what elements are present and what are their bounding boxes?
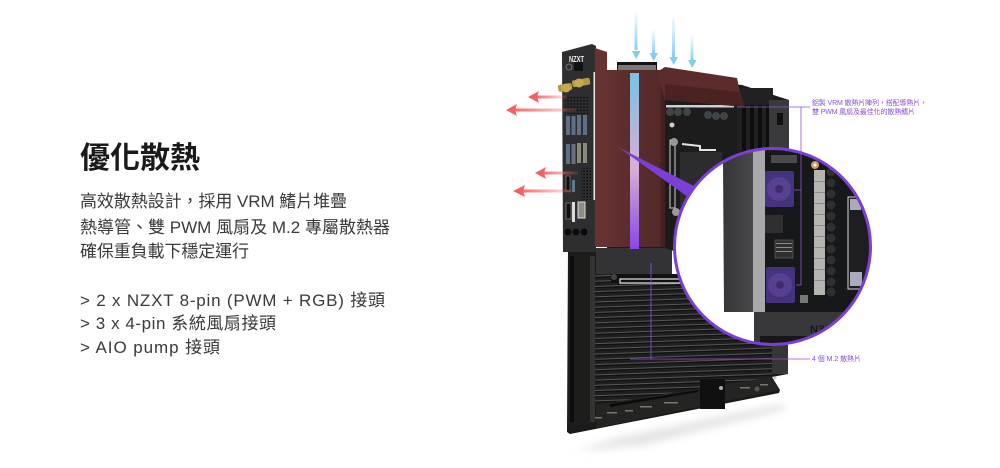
top power connectors <box>617 62 657 76</box>
RAM slots <box>737 88 773 158</box>
capacitors row <box>666 105 734 128</box>
description text block: 熱導管、雙 PWM 風扇及 M.2 專屬散熱器 <box>80 218 390 237</box>
zoomed bottom block: NZ <box>810 324 825 336</box>
leader lines <box>630 107 810 359</box>
callout: VRM heatsink: 雙 PWM 風扇及最佳化的散熱鰭片 <box>812 107 915 116</box>
zoomed chips <box>765 155 808 303</box>
connector list: > 2 x NZXT 8-pin (PWM + RGB) 接頭 <box>80 291 385 310</box>
PCB lower board <box>567 250 788 434</box>
cool air arrows <box>632 12 696 68</box>
description text block: 高效散熱設計，採用 VRM 鰭片堆疊 <box>80 192 347 211</box>
description text block: 確保重負載下穩定運行 <box>80 242 249 261</box>
I/O shield <box>558 44 596 252</box>
callout: VRM heatsink <box>812 98 927 116</box>
right edge block <box>769 100 789 160</box>
callout wedge <box>618 147 694 197</box>
title: 優化散熱 <box>80 142 200 175</box>
maroon shroud column <box>595 48 665 247</box>
description text block <box>80 192 390 261</box>
PCIe slot <box>611 274 682 283</box>
USB ports <box>566 115 587 164</box>
NZXT logo: NZXT <box>569 55 584 64</box>
connector list <box>80 291 385 357</box>
rear connector <box>700 379 725 409</box>
chipset block <box>596 248 672 274</box>
zoomed PCB <box>765 150 859 312</box>
zoom circle detail <box>674 148 875 348</box>
chokes <box>826 168 836 296</box>
hot air arrows <box>506 91 578 197</box>
callout: VRM heatsink: 鋁製 VRM 散熱片陣列，搭配導熱片， <box>812 98 927 107</box>
CPU socket <box>670 138 722 216</box>
connector list: > AIO pump 接頭 <box>80 338 220 357</box>
lit strip <box>630 73 639 249</box>
zoomed bottom block <box>754 312 843 343</box>
maroon VRM heatsink <box>657 67 745 107</box>
left black strip <box>568 253 595 425</box>
centre board <box>607 72 789 260</box>
connector list: > 3 x 4-pin 系統風扇接頭 <box>80 314 276 333</box>
purple fans <box>765 171 795 303</box>
M.2 heatsink fins <box>595 274 790 405</box>
zoomed shroud side <box>723 150 753 312</box>
board shadow <box>575 404 788 451</box>
silver cap bank <box>811 161 825 295</box>
zoomed socket edge <box>848 196 862 290</box>
callout: M.2 heatsinks: 4 個 M.2 散熱片 <box>812 354 861 363</box>
motherboard illustration <box>558 44 790 451</box>
antenna connectors <box>558 77 591 92</box>
right column below circle <box>772 345 788 374</box>
